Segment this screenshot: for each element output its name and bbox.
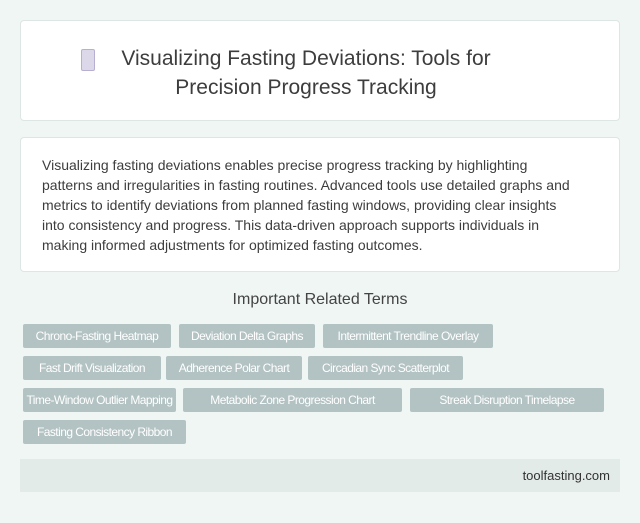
icon: document (81, 49, 95, 71)
description panel (20, 137, 620, 272)
tags: Fast Drift Visualization (39, 361, 145, 375)
tags: Adherence Polar Chart (179, 361, 289, 375)
tags: Intermittent Trendline Overlay (338, 329, 478, 343)
footer text: toolfasting.com (523, 468, 610, 483)
tags: Circadian Sync Scatterplot (322, 361, 449, 375)
tags: Fasting Consistency Ribbon (37, 425, 172, 439)
tags: Streak Disruption Timelapse (439, 393, 575, 407)
footer (20, 459, 620, 492)
tags: Metabolic Zone Progression Chart (210, 393, 375, 407)
header panel (20, 20, 620, 121)
description text: Visualizing fasting deviations enables precise progress tracking by highlighting patterns and irregularities in fasting routines. Advanced tools use detailed graphs and metrics to identify deviations from planned fasting windows, providing clear insights into consistency and progress. This data-driven approach supports individuals in making informed adjustments for optimized fasting outcomes. (42, 157, 570, 253)
tags: Time-Window Outlier Mapping (26, 393, 173, 407)
tags: Deviation Delta Graphs (191, 329, 303, 343)
tags: Chrono-Fasting Heatmap (36, 329, 158, 343)
section heading: Important Related Terms (233, 291, 407, 308)
title: Visualizing Fasting Deviations: Tools for Precision Progress Tracking (121, 47, 491, 99)
